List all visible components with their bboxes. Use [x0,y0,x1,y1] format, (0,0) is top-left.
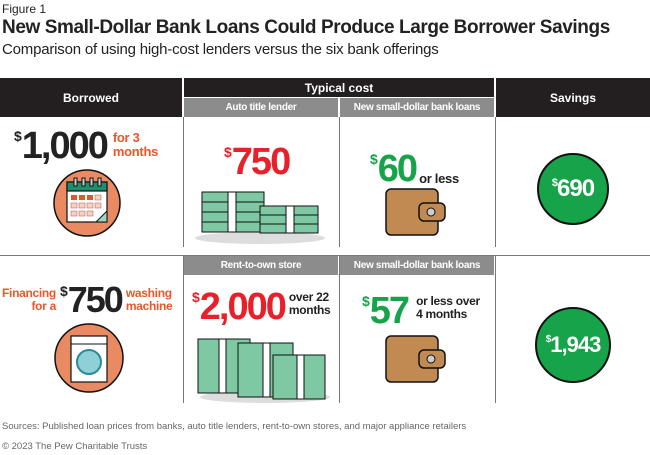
savings circle row1: 690 [557,175,594,202]
icon: cash stacks row2 [198,338,330,403]
row2 borrowed [2,279,172,320]
row1 bank cost: $60 [370,148,416,190]
row1 borrowed amount: months [113,144,158,159]
row2 bank cost: 4 months [416,307,467,321]
header: borrowed [0,78,182,117]
sources note: Sources: Published loan prices from banks, auto title lenders, rent-to-own stores, and major appliance retailers [2,421,466,432]
row2 rent-to-own cost: months [289,303,330,317]
subheader: rent-to-own: Rent-to-own store [221,260,301,271]
row1 borrowed amount: for 3 [113,130,140,145]
row2 rent-to-own cost: $2,000 [192,286,285,328]
row2 borrowed: Financing [2,286,56,300]
figure label: Figure 1 [2,2,46,16]
subheader: bank loans row 2: New small-dollar bank loans [354,260,480,271]
row1 bank cost: or less [419,171,459,186]
subheader: auto title lender [184,98,338,117]
row1 auto title cost: $750 [224,141,289,183]
row2 rent-to-own cost [192,286,330,328]
savings circle row2: 1,943 [550,332,600,357]
subheader: bank loans row 2 [340,256,494,275]
savings circle row2: $ [546,334,550,344]
subheader: auto title lender: Auto title lender [225,102,296,113]
row1 borrowed amount: $1,000 [14,125,107,167]
row1 borrowed amount [14,125,158,167]
icon: cash stacks row1 [195,192,325,244]
header: savings [496,78,650,117]
savings circle row1: $ [552,177,557,189]
savings circle row2 [535,307,611,383]
icon: wallet row1 [385,188,446,236]
row2 borrowed: washing [126,286,172,300]
header: typical cost [184,78,494,97]
icon: calendar [53,169,121,237]
header: typical cost: Typical cost [305,80,373,94]
subheader: bank loans row 1 [340,98,494,117]
subheader: rent-to-own [184,256,338,275]
row1 bank cost [370,148,459,190]
title: New Small-Dollar Bank Loans Could Produce Large Borrower Savings [2,17,610,38]
row2 borrowed: machine [126,299,172,313]
copyright: © 2023 The Pew Charitable Trusts [2,441,147,452]
header: borrowed: Borrowed [63,90,119,104]
row2 borrowed: $750 [60,279,122,320]
subtitle: Comparison of using high-cost lenders versus the six bank offerings [2,41,439,58]
row2 bank cost: or less over [416,294,480,308]
icon: washing machine [54,323,124,393]
row2 rent-to-own cost: over 22 [289,290,329,304]
row2 borrowed: for a [31,299,56,313]
row2 bank cost: $57 [362,290,408,332]
savings circle row1 [537,153,609,225]
icon: wallet row2 [385,335,446,383]
header: savings: Savings [550,90,596,104]
row2 bank cost [362,290,480,332]
subheader: bank loans row 1: New small-dollar bank loans [354,102,480,113]
